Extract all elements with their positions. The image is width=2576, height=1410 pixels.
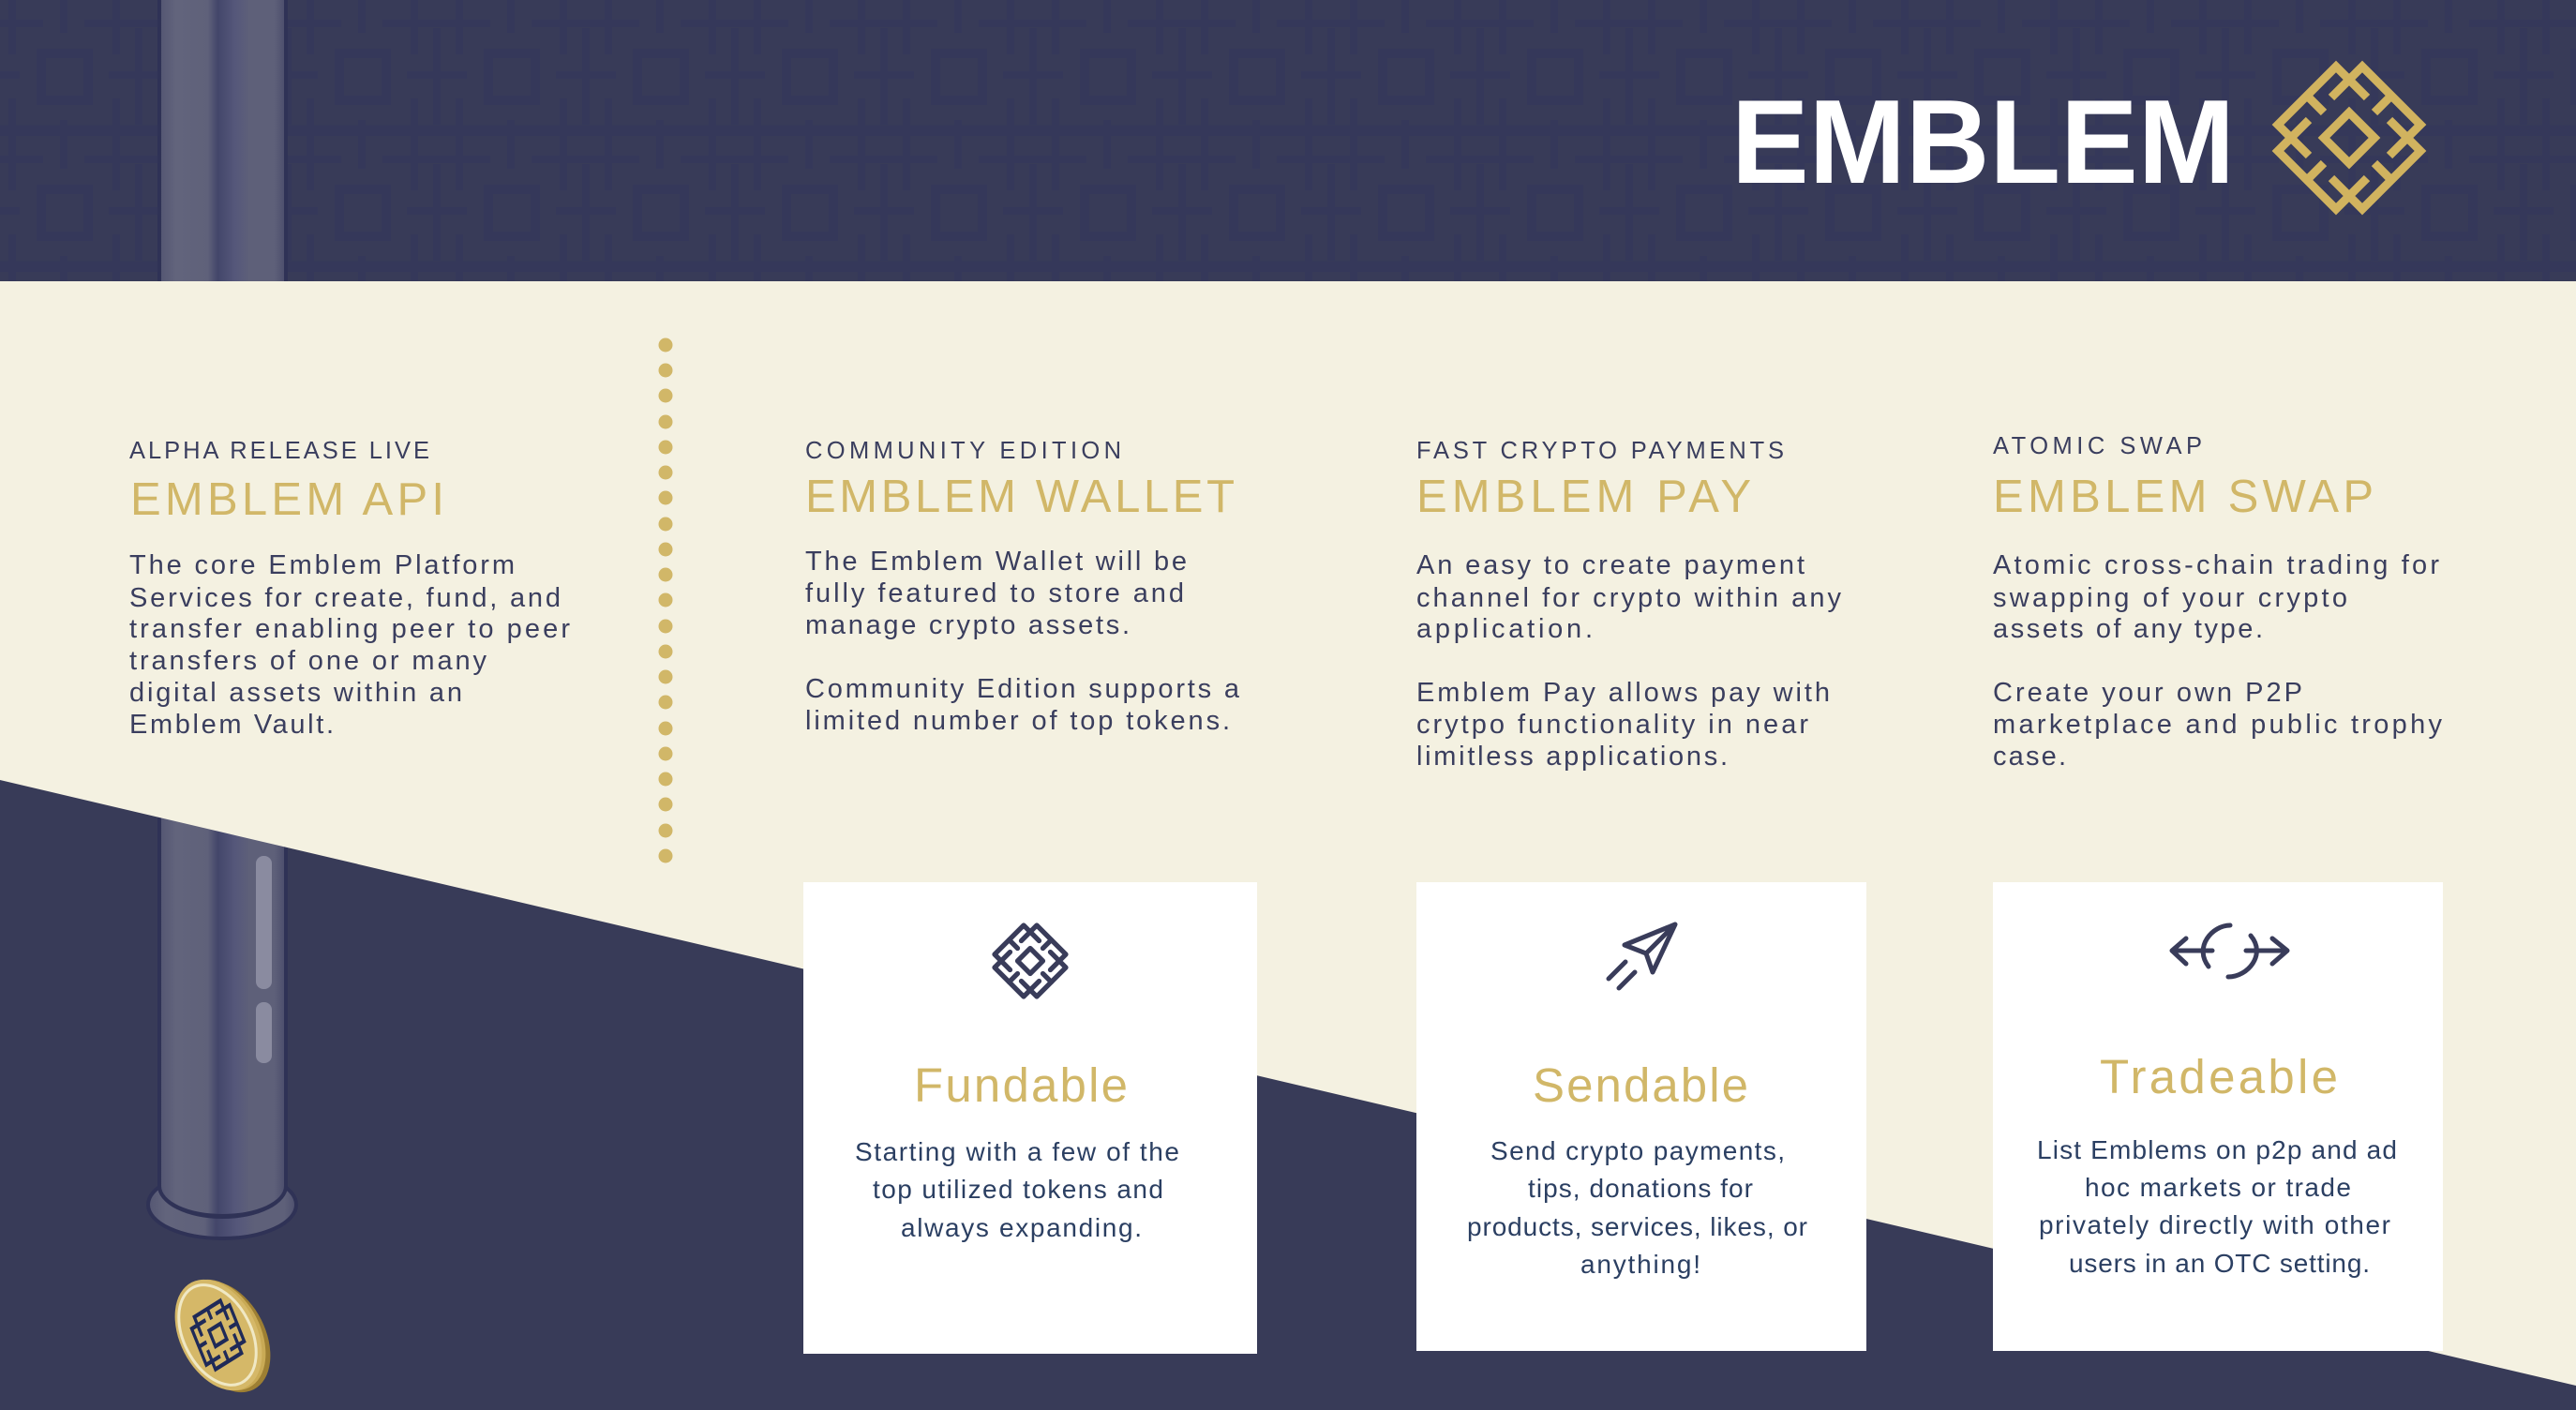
- column: Emblem Swap: EMBLEM SWAP: [1993, 472, 2374, 522]
- column: Emblem Pay: Emblem Pay allows pay with: [1416, 678, 1830, 708]
- header band with maze pattern: [0, 0, 2576, 281]
- card: Sendable: tips, donations for: [1528, 1174, 1753, 1203]
- column: Emblem Pay: EMBLEM PAY: [1416, 472, 1751, 522]
- column: Emblem API: EMBLEM API: [130, 474, 444, 525]
- card: Fundable: Starting with a few of the: [855, 1137, 1179, 1166]
- card: Sendable: [1416, 882, 1866, 1351]
- column: Emblem Wallet: EMBLEM WALLET: [805, 472, 1235, 522]
- coin: [157, 1265, 288, 1407]
- column: Emblem Pay: channel for crypto within any: [1416, 583, 1841, 613]
- pipe: upper section: [157, 0, 288, 281]
- column: Emblem Wallet: limited number of top tokens.: [805, 706, 1230, 736]
- column: Emblem API: Services for create, fund, and: [129, 583, 561, 613]
- pipe: lower section with flange: [148, 797, 296, 1238]
- dotted divider: [658, 338, 673, 862]
- column: Emblem Pay: limitless applications.: [1416, 742, 1728, 772]
- column: Emblem Swap: ATOMIC SWAP: [1993, 433, 2202, 459]
- column: Emblem Swap: assets of any type.: [1993, 614, 2263, 644]
- column: Emblem Swap: Atomic cross-chain trading for: [1993, 550, 2439, 580]
- logo wordmark: EMBLEM: [1731, 75, 2235, 208]
- logo icon: gold diamond emblem: [2278, 67, 2420, 209]
- card: Sendable: Sendable: [1533, 1058, 1748, 1112]
- column: Emblem Pay: [1416, 438, 1841, 772]
- card: Fundable: top utilized tokens and: [873, 1175, 1163, 1204]
- column: Emblem Wallet: [805, 438, 1240, 736]
- column: Emblem Wallet: COMMUNITY EDITION: [805, 438, 1121, 464]
- icon: paper plane: [1609, 924, 1675, 988]
- column: Emblem Swap: [1993, 433, 2443, 772]
- column: Emblem API: digital assets within an: [129, 678, 462, 708]
- icon: emblem diamond: [995, 925, 1066, 997]
- card: Tradeable: Tradeable: [2100, 1050, 2338, 1103]
- column: Emblem Wallet: manage crypto assets.: [805, 610, 1130, 640]
- card: Sendable: products, services, likes, or: [1467, 1212, 1807, 1241]
- column: Emblem Pay: FAST CRYPTO PAYMENTS: [1416, 438, 1784, 464]
- column: Emblem Swap: swapping of your crypto: [1993, 583, 2347, 613]
- icon: coin emblem: [186, 1291, 250, 1379]
- card: Tradeable: [1993, 882, 2443, 1351]
- icon: swap arrows: [2172, 925, 2287, 977]
- column: Emblem Wallet: Community Edition supports a: [805, 674, 1240, 704]
- column: Emblem API: Emblem Vault.: [129, 710, 334, 740]
- card: Tradeable: privately directly with other: [2039, 1210, 2390, 1239]
- column: Emblem Wallet: fully featured to store and: [805, 578, 1184, 608]
- card: Fundable: [803, 882, 1257, 1354]
- column: Emblem API: [129, 438, 570, 740]
- card: Sendable: anything!: [1580, 1250, 1700, 1279]
- column: Emblem Swap: marketplace and public trophy: [1993, 710, 2443, 740]
- card: Sendable: Send crypto payments,: [1490, 1136, 1785, 1165]
- column: Emblem Pay: An easy to create payment: [1416, 550, 1805, 580]
- card: Fundable: always expanding.: [901, 1213, 1142, 1242]
- column: Emblem API: transfer enabling peer to peer: [129, 614, 570, 644]
- pipe highlights: [256, 856, 272, 1063]
- column: Emblem API: ALPHA RELEASE LIVE: [129, 438, 429, 464]
- column: Emblem Swap: case.: [1993, 742, 2066, 772]
- card: Tradeable: hoc markets or trade: [2085, 1173, 2351, 1202]
- card: Tradeable: List Emblems on p2p and ad: [2037, 1135, 2397, 1164]
- column: Emblem Pay: crytpo functionality in near: [1416, 710, 1808, 740]
- column: Emblem Swap: Create your own P2P: [1993, 678, 2302, 708]
- column: Emblem API: transfers of one or many: [129, 646, 487, 676]
- column: Emblem API: The core Emblem Platform: [129, 550, 515, 580]
- cream content panel with diagonal lower edge: [0, 281, 2576, 1386]
- card: Fundable: Fundable: [914, 1058, 1128, 1112]
- column: Emblem Pay: application.: [1416, 614, 1593, 644]
- column: Emblem Wallet: The Emblem Wallet will be: [805, 547, 1187, 577]
- card: Tradeable: users in an OTC setting.: [2069, 1249, 2370, 1278]
